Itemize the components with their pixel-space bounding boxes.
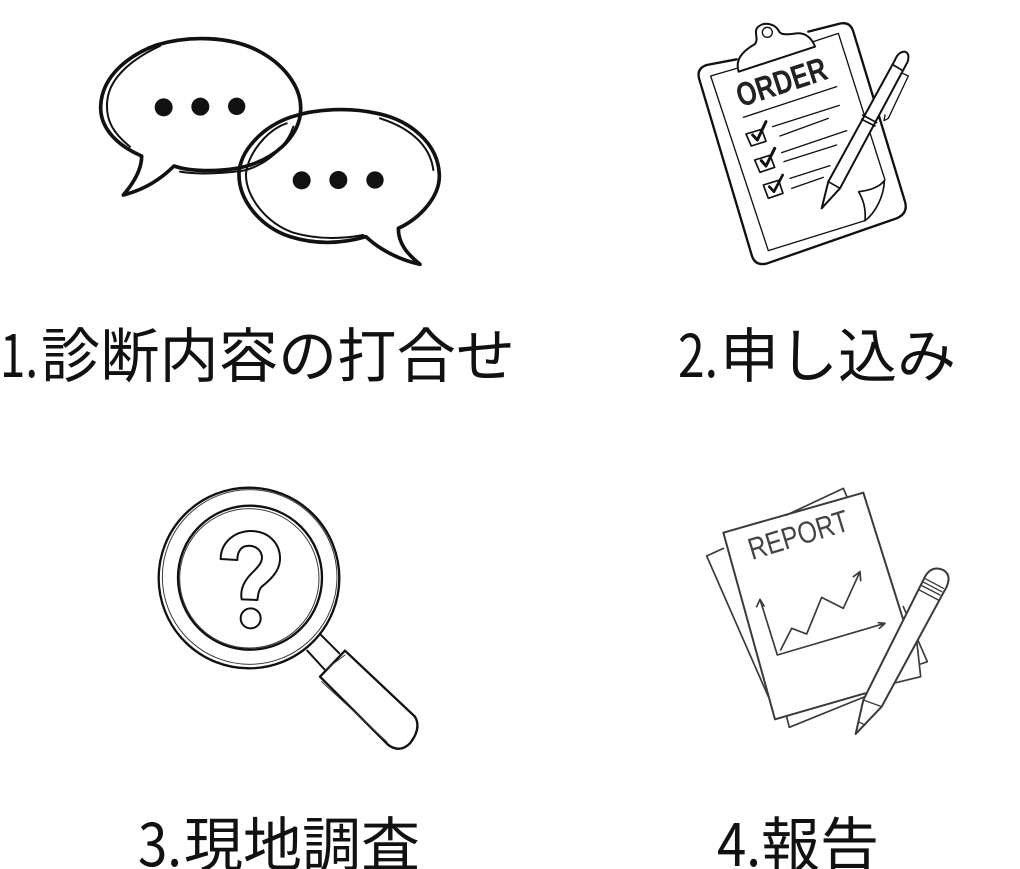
icon: magnifying glass with question mark [159,488,417,749]
inner lens ring [178,506,322,650]
left speech bubble [101,39,301,195]
report heading: REPORT [744,504,853,567]
label: step 2: 申し込み [720,309,956,394]
pen [822,52,908,208]
pencil [856,568,949,734]
front sheet [723,493,903,719]
label: step 1: 1. [0,309,38,394]
order heading: ORDER [732,51,832,115]
icon: order clipboard [699,23,908,264]
paper [711,33,885,251]
handle [307,634,417,749]
question mark [221,531,280,628]
right speech bubble [239,110,439,264]
clipboard board [699,23,906,264]
clip hole [762,27,772,37]
clip [738,24,815,72]
back sheets [707,488,927,727]
label: step 1: 診断内容の打合せ [41,309,515,394]
label: step 2: 2. [678,309,718,394]
line chart [757,572,885,655]
icon: speech bubbles [101,39,439,264]
icon: report with pencil [707,488,949,734]
checkbox rows [746,122,783,198]
page curl [859,181,884,221]
outer lens ring [159,488,339,668]
checklist lines [743,87,847,188]
